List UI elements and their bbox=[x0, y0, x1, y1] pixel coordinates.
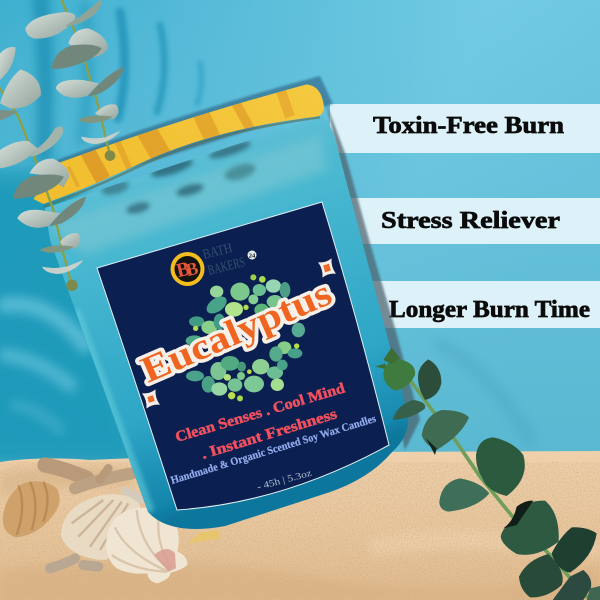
sand ground bbox=[0, 451, 600, 600]
brand logo: BATH bbox=[201, 241, 234, 263]
feature bar: Longer Burn Time: Longer Burn Time bbox=[389, 297, 590, 323]
sprig leaves lower bbox=[0, 47, 86, 291]
product description: Handmade & Organic Scented Soy Wax Candles bbox=[169, 413, 378, 487]
left eucalyptus sprigs bbox=[0, 0, 124, 291]
sprig stems bbox=[0, 0, 110, 285]
sea shells and coral bbox=[3, 465, 220, 583]
jar frosted details bbox=[50, 135, 410, 540]
jar body bbox=[45, 116, 408, 529]
scallop shell front bbox=[106, 508, 187, 583]
candle jar bbox=[33, 84, 410, 540]
scallop shell back bbox=[61, 494, 140, 560]
brand logo: B bbox=[174, 258, 192, 282]
brand logo: BAKERS bbox=[206, 255, 247, 279]
tagline line one: Clean Senses . Cool Mind bbox=[174, 380, 348, 446]
product name: Eucalyptus bbox=[135, 273, 338, 391]
feature bar: Longer Burn Time bbox=[370, 281, 600, 328]
sparkle bottom left bbox=[142, 389, 160, 409]
sprig leaves upper bbox=[25, 0, 124, 161]
product label bbox=[97, 202, 389, 510]
feature bar: Toxin-Free Burn: Toxin-Free Burn bbox=[373, 113, 564, 139]
lid bbox=[33, 84, 324, 207]
coral bbox=[45, 465, 140, 568]
brand logo bbox=[170, 241, 256, 286]
branch stem bbox=[410, 380, 587, 597]
eucalyptus wreath bbox=[186, 274, 305, 401]
brown ribbed shell bbox=[3, 481, 60, 537]
burn time and weight: - 45h | 5.3oz bbox=[256, 469, 313, 493]
brand logo: 24 bbox=[249, 252, 256, 260]
background wall bbox=[0, 0, 600, 470]
feature bar: Stress Reliever: Stress Reliever bbox=[381, 208, 560, 234]
brand logo: B bbox=[184, 258, 200, 280]
palm leaf shadows bbox=[5, 0, 530, 440]
sparkle top right bbox=[318, 258, 336, 278]
feature bar: Toxin-Free Burn bbox=[330, 104, 600, 153]
jar shadow on wall bbox=[57, 76, 420, 450]
branch leaves bbox=[375, 347, 600, 600]
right eucalyptus branch bbox=[375, 347, 600, 600]
tagline line two: . Instant Freshness bbox=[199, 406, 339, 463]
feature bar: Stress Reliever bbox=[350, 198, 600, 244]
yellow striped shell bbox=[188, 530, 220, 543]
